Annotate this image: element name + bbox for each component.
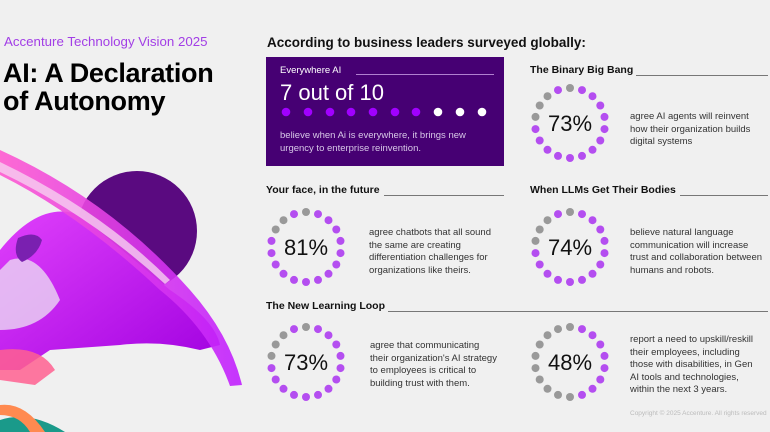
section: The New Learning Loop: The New Learning Loop — [266, 300, 385, 312]
subtitle: Accenture Technology Vision 2025 — [4, 34, 208, 49]
section: upskill 48% — [532, 323, 753, 401]
section: The New Learning Loop: 73% — [284, 350, 328, 375]
hero illustration — [0, 150, 242, 432]
section: When LLMs Get Their Bodies — [530, 184, 768, 286]
section: Binary Big Bang — [530, 64, 768, 162]
section: Binary Big Bang: 73% — [548, 111, 592, 136]
section: When LLMs Get Their Bodies: 74% — [548, 235, 592, 260]
section: Your face, in the future: Your face, in the future — [266, 184, 380, 196]
heading: survey intro: According to business leaders surveyed globally: — [267, 35, 586, 50]
title: AI: A Declaration — [3, 58, 213, 88]
section: Your face, in the future — [266, 184, 504, 286]
section: Your face, in the future: agree chatbots that all sound the same are creating differentiation challenges for organizations like theirs. — [369, 227, 491, 276]
section: When LLMs Get Their Bodies: believe natural language communication will increase trust and collaboration between humans and robots. — [630, 227, 762, 276]
section: The New Learning Loop — [266, 300, 768, 401]
heading: Everywhere AI: Everywhere AI — [280, 65, 341, 76]
dots row — [282, 108, 486, 116]
title: of Autonomy — [3, 86, 165, 116]
section: upskill 48%: report a need to upskill/reskill their employees, including those with disabilities, in Gen AI tools and technologies, within the next 3 years. — [630, 334, 753, 395]
section: Binary Big Bang: The Binary Big Bang — [530, 64, 633, 76]
section: upskill 48%: 48% — [548, 350, 592, 375]
copyright: Copyright © 2025 Accenture. All rights reserved — [630, 410, 767, 417]
stat: 7 out of 10: 7 out of 10 — [280, 80, 384, 105]
title — [3, 58, 213, 116]
section: The New Learning Loop: agree that communicating their organization's AI strategy to employees is critical to building trust with them. — [370, 340, 497, 388]
section: When LLMs Get Their Bodies: When LLMs Get Their Bodies — [530, 184, 676, 196]
section: Binary Big Bang: agree AI agents will reinvent how their organization builds digital systems — [630, 111, 750, 147]
section: Your face, in the future: 81% — [284, 235, 328, 260]
panel: Everywhere AI — [266, 57, 504, 166]
text: believe when Ai is everywhere, it brings new urgency to enterprise reinvention. — [280, 130, 466, 154]
